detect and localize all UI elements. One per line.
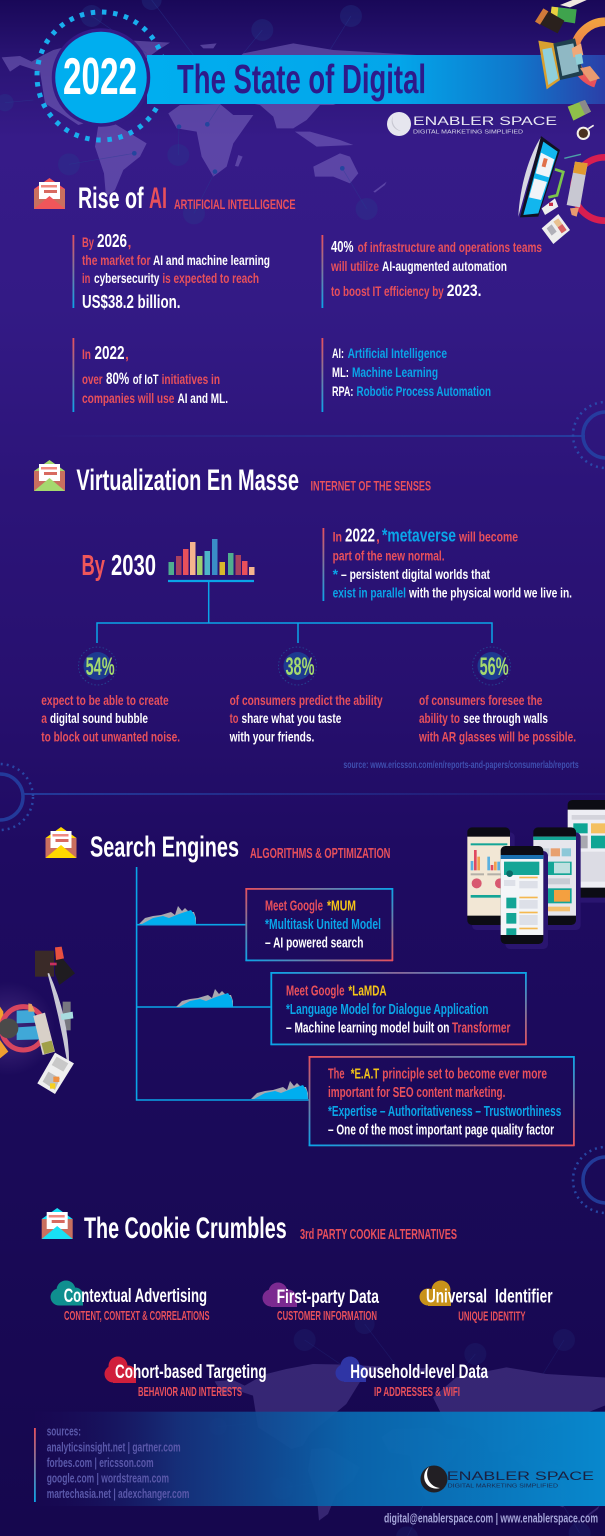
item: universal identifier: Identifier <box>495 1287 553 1308</box>
stat: 38 percent: to <box>230 710 238 726</box>
text block: IoT initiatives: of IoT <box>133 371 159 387</box>
logo: bottom: DIGITAL MARKETING SIMPLIFIED <box>448 1484 558 1490</box>
callout: LaMDA: *LaMDA <box>348 984 387 1000</box>
stat: 56 percent <box>418 647 576 745</box>
title: The State of Digital <box>177 56 426 102</box>
text block: 40 percent: will utilize <box>330 258 379 274</box>
stat: 38 percent <box>229 647 383 745</box>
bar chart <box>168 539 254 575</box>
callout: MUM: *Multitask United Model <box>265 917 381 933</box>
icon: envelope green <box>34 460 65 491</box>
text block: market for AI: By <box>82 234 94 250</box>
text block: glossary <box>322 338 491 412</box>
text block: IoT initiatives: companies will use <box>82 390 175 406</box>
text block: IoT initiatives: over <box>82 371 103 387</box>
footer band <box>35 1412 605 1506</box>
icon: envelope yellow <box>46 827 76 858</box>
item: household-level data: IP ADDRESSES & WIFI <box>374 1384 460 1399</box>
text block: market for AI: in <box>82 270 90 286</box>
text block: IoT initiatives: initiatives in <box>162 371 220 387</box>
text block: glossary: Robotic Process Automation <box>356 383 491 399</box>
sources: analyticsinsight.net | gartner.com <box>47 1440 181 1455</box>
phone: left <box>467 827 515 930</box>
stat: 56 percent: 56% <box>480 653 509 681</box>
callout: MUM: Meet Google <box>265 899 323 915</box>
section: Virtualization En Masse <box>34 460 579 771</box>
callout: E.A.T <box>309 1056 575 1146</box>
stat: 54 percent <box>41 647 180 745</box>
label: By 2030: 2030 <box>111 550 156 582</box>
item: universal identifier: Universal <box>426 1287 487 1308</box>
text block: market for AI: , <box>128 234 131 250</box>
phone: centre right <box>533 827 581 930</box>
label: By 2030: By <box>82 550 105 582</box>
heading: Search Engines: ALGORITHMS & OPTIMIZATION <box>250 846 390 862</box>
stat: 54 percent: digital sound bubble <box>50 710 148 726</box>
text block: market for AI: the market for <box>82 252 151 268</box>
text block: 40 percent: 2023. <box>447 281 482 300</box>
heading: Rise of AI: Rise of <box>78 182 144 215</box>
item: household-level data: Household-level Data <box>350 1362 488 1383</box>
callout: LaMDA: Transformer <box>452 1021 511 1037</box>
phone: far right <box>568 800 605 903</box>
callout: E.A.T: The <box>328 1067 344 1083</box>
callout: MUM <box>245 888 393 961</box>
icon: envelope red <box>34 178 65 209</box>
item: contextual advertising: Contextual Advertising <box>64 1286 207 1307</box>
heading: Rise of AI <box>78 182 296 215</box>
text block: market for AI: AI and machine learning <box>153 252 270 268</box>
stat: 38 percent: with your friends. <box>229 729 314 745</box>
stat: 54 percent: expect to be able to create <box>41 692 169 708</box>
stat: 56 percent: ability to <box>419 710 460 726</box>
label: By 2030 <box>82 550 156 582</box>
illustration: desk with laptop <box>535 0 605 121</box>
title banner <box>147 55 605 104</box>
text block: glossary: AI: <box>332 345 344 361</box>
illustration: desk with keyboard <box>0 947 75 1094</box>
text block: market for AI: US$38.2 billion. <box>82 291 180 312</box>
illustration: phones <box>467 800 605 949</box>
item: contextual advertising <box>50 1280 210 1323</box>
year badge <box>54 30 148 125</box>
text block: market for AI: cybersecurity <box>94 270 160 286</box>
stat: 56 percent: of consumers foresee the <box>419 692 543 708</box>
heading: Virtualization En Masse: Virtualization En Masse <box>76 464 299 497</box>
text block: glossary: Machine Learning <box>352 364 438 380</box>
logo: bottom: ENABLER SPACE <box>447 1471 595 1483</box>
heading: The Cookie Crumbles: The Cookie Crumbles <box>84 1212 287 1245</box>
logo: top: ENABLER SPACE <box>413 116 557 128</box>
stat: 38 percent: share what you taste <box>242 710 342 726</box>
world map: bottom <box>209 1314 605 1536</box>
item: cohort-based targeting: BEHAVIOR AND INTERESTS <box>138 1384 242 1399</box>
item: household-level data <box>336 1356 488 1399</box>
text block: market for AI: is expected to reach <box>162 270 259 286</box>
text block: metaverse: will become <box>458 529 518 545</box>
year badge: 2022 <box>63 48 137 106</box>
callout: LaMDA: *Language Model for Dialogue Application <box>286 1002 488 1018</box>
text block: metaverse: * <box>333 566 339 582</box>
divider ring: left <box>0 764 605 830</box>
text block: glossary: RPA: <box>332 383 353 399</box>
callout: LaMDA <box>270 972 527 1045</box>
text block: metaverse: , <box>376 529 380 545</box>
sources: martechasia.net | adexchanger.com <box>47 1486 189 1501</box>
stat: 38 percent: 38% <box>286 653 314 681</box>
connector tree <box>97 581 492 643</box>
phone: front <box>501 846 548 949</box>
text block: metaverse: In <box>333 529 342 545</box>
stat: 54 percent: 54% <box>86 653 115 681</box>
section: Search Engines <box>0 800 605 1146</box>
icon: envelope cyan <box>42 1208 73 1239</box>
world map: top <box>0 0 417 224</box>
tree lines <box>137 867 309 1100</box>
stat: 56 percent: see through walls <box>463 710 548 726</box>
callout: MUM: – AI powered search <box>265 936 363 952</box>
stat: 54 percent: a <box>41 710 47 726</box>
heading: Rise of AI: ARTIFICIAL INTELLIGENCE <box>174 196 296 212</box>
item: first-party data: First-party Data <box>277 1287 379 1308</box>
section: The Cookie Crumbles <box>42 1208 553 1399</box>
callout: LaMDA: – Machine learning model built on <box>286 1021 450 1037</box>
text block: glossary: Artificial Intelligence <box>348 345 447 361</box>
logo: top <box>387 112 557 136</box>
callout: MUM: *MUM <box>327 899 356 915</box>
text block: glossary: ML: <box>332 364 349 380</box>
text block: 40 percent: AI-augmented automation <box>382 258 507 274</box>
heading: Search Engines: Search Engines <box>90 832 239 864</box>
text block: 40 percent: to boost IT efficiency by <box>331 283 444 299</box>
text block: IoT initiatives: 80% <box>106 369 129 388</box>
dotted ring around year badge <box>37 12 165 140</box>
text block: IoT initiatives: AI and ML. <box>178 390 228 406</box>
text block: IoT initiatives <box>72 338 228 412</box>
item: universal identifier <box>420 1280 553 1324</box>
item: cohort-based targeting: Cohort-based Targeting <box>115 1362 267 1383</box>
text block: metaverse: *metaverse <box>382 526 456 546</box>
text block: market for AI: 2026 <box>97 231 127 251</box>
heading: Rise of AI: AI <box>149 182 167 215</box>
item: cohort-based targeting <box>104 1356 267 1399</box>
stat: 54 percent: to block out unwanted noise. <box>41 729 180 745</box>
text block: metaverse: part of the new normal. <box>333 548 445 564</box>
sources: google.com | wordstream.com <box>47 1471 169 1486</box>
text block: metaverse: 2022 <box>345 526 375 546</box>
logo: bottom <box>420 1466 595 1492</box>
text block: IoT initiatives: In <box>82 346 91 362</box>
item: universal identifier: UNIQUE IDENTITY <box>458 1309 526 1324</box>
text block: 40 percent: 40% <box>331 239 354 256</box>
callout: E.A.T: *E.A.T <box>351 1067 379 1083</box>
text block: IoT initiatives: , <box>125 346 129 362</box>
heading: The Cookie Crumbles: 3rd PARTY COOKIE ALTERNATIVES <box>300 1227 457 1243</box>
text block: metaverse: exist in parallel <box>333 585 406 601</box>
heading: Virtualization En Masse: INTERNET OF THE SENSES <box>310 478 431 494</box>
text block: IoT initiatives: 2022 <box>94 343 124 363</box>
text block: market for AI <box>72 231 270 312</box>
mini chart 2 <box>176 989 233 1007</box>
text block: metaverse <box>322 526 572 601</box>
sources: forbes.com | ericsson.com <box>47 1455 154 1470</box>
mini chart 3 <box>251 1081 308 1099</box>
illustration: desk with monitor <box>518 125 605 244</box>
mini chart 1 <box>139 906 196 924</box>
section: Rise of AI <box>34 178 542 412</box>
sources <box>34 1424 189 1502</box>
text block: 40 percent <box>322 235 542 308</box>
item: first-party data <box>262 1282 379 1323</box>
divider ring: lower right <box>573 1147 605 1213</box>
logo: top: DIGITAL MARKETING SIMPLIFIED <box>413 130 523 136</box>
text block: metaverse: – persistent digital worlds that <box>341 566 490 582</box>
sources: sources: <box>47 1424 81 1439</box>
item: contextual advertising: CONTENT, CONTEXT & CORRELATIONS <box>64 1308 210 1323</box>
callout: E.A.T: important for SEO content marketing. <box>328 1085 505 1101</box>
stat: 38 percent: of consumers predict the ability <box>230 692 383 708</box>
item: first-party data: CUSTOMER INFORMATION <box>277 1308 377 1323</box>
callout: LaMDA: Meet Google <box>286 984 344 1000</box>
divider ring: right <box>45 402 605 468</box>
